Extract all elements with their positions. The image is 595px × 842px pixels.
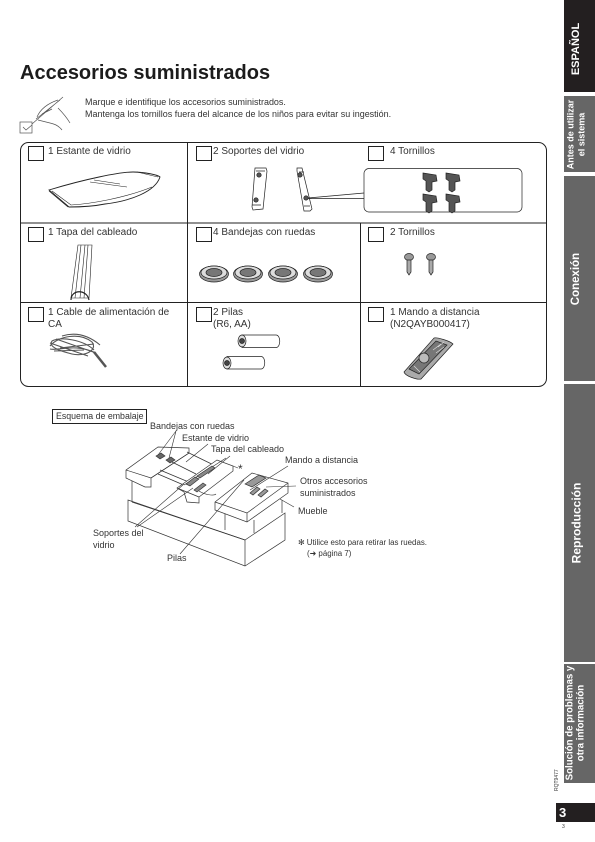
- page number: [556, 803, 595, 822]
- tab: solución: Solución de problemas y: [565, 665, 576, 780]
- label: 4 tornillos: 4 Tornillos: [390, 146, 435, 157]
- label: otros accesorios: suministrados: [300, 488, 356, 498]
- tab: solución: [564, 664, 595, 783]
- page number: 3: [559, 805, 566, 820]
- icon: remote control: [404, 338, 453, 379]
- note: (➜ página 7): [307, 549, 351, 558]
- title: Accesorios suministrados: [20, 62, 270, 84]
- icon: glass shelf: [49, 172, 160, 207]
- label: pilas: (R6, AA): [213, 319, 251, 330]
- icon: batteries: [223, 335, 280, 369]
- label: soportes: vidrio: [93, 540, 115, 550]
- checkbox: tapa: [28, 227, 44, 242]
- label: asterisk: *: [238, 462, 243, 476]
- label: pilas: 2 Pilas: [213, 307, 243, 318]
- tab: reproducción: Reproducción: [569, 483, 583, 563]
- checkbox: mando: [368, 307, 384, 322]
- label: tapa del cableado: 1 Tapa del cableado: [48, 227, 137, 238]
- back surface: [150, 451, 288, 520]
- checkbox: 2 tornillos: [368, 227, 384, 242]
- label: esquema de embalaje: [52, 409, 147, 424]
- label: esquema de embalaje: Esquema de embalaje: [56, 411, 144, 421]
- instructions text: [85, 97, 391, 119]
- furniture sides: [132, 480, 282, 540]
- icon: caster trays: [200, 266, 332, 282]
- small trays: [156, 453, 175, 463]
- checkbox: estante: [28, 146, 44, 161]
- label: estante: Estante de vidrio: [182, 433, 249, 443]
- label: cable de alimentación: 1 Cable de alimentación de: [48, 307, 169, 318]
- callout labels for packing diagram: [93, 421, 427, 563]
- label: mando a distancia: (N2QAYB000417): [390, 319, 470, 330]
- tab: solución: otra información: [576, 684, 587, 761]
- label: mueble: Mueble: [298, 506, 328, 516]
- checkbox: soportes: [196, 146, 212, 161]
- label: cable de alimentación: CA: [48, 319, 62, 330]
- tab: antes de utilizar: [564, 96, 595, 172]
- tab: español: [564, 0, 595, 92]
- left foam: [126, 447, 189, 487]
- checkbox: pilas: [196, 307, 212, 322]
- callout: four screws: [308, 168, 522, 213]
- label: soportes del vidrio: 2 Soportes del vidrio: [213, 146, 304, 157]
- panel: accessories table: [20, 142, 547, 387]
- label: pilas: Pilas: [167, 553, 187, 563]
- document code: RQT9477: [554, 769, 560, 791]
- tab: reproducción: [564, 384, 595, 662]
- icon: small screws: [404, 254, 436, 275]
- right foam: [215, 473, 288, 522]
- note: ✻ Utilice esto para retirar las ruedas.: [298, 538, 427, 547]
- label: estante de vidrio: 1 Estante de vidrio: [48, 146, 131, 157]
- label: bandejas: Bandejas con ruedas: [150, 421, 235, 431]
- label: tapa: Tapa del cableado: [211, 444, 284, 454]
- label: otros accesorios: [300, 476, 368, 498]
- instructions text: Marque e identifique los accesorios suministrados.: [85, 97, 286, 107]
- label: soportes: Soportes del: [93, 528, 144, 538]
- label: 2 tornillos: 2 Tornillos: [390, 227, 435, 238]
- tab: antes de utilizar: el sistema: [576, 112, 586, 156]
- icon: power cable: [50, 334, 106, 367]
- checkbox: bandejas: [196, 227, 212, 242]
- icon: wiring cover: [71, 245, 92, 300]
- note: [298, 538, 427, 558]
- label: mando: Mando a distancia: [285, 455, 358, 465]
- label: mando a distancia: [390, 307, 480, 330]
- icon: hand marking checkbox: [20, 96, 70, 134]
- tab: conexión: [564, 176, 595, 381]
- checkbox: tornillos: [368, 146, 384, 161]
- tab: antes de utilizar: Antes de utilizar: [565, 99, 575, 169]
- checkbox: cable: [28, 307, 44, 322]
- tab: conexión: Conexión: [570, 252, 582, 305]
- small page number: 3: [562, 824, 565, 830]
- label: bandejas con ruedas: 4 Bandejas con ruedas: [213, 227, 315, 238]
- label: mando a distancia: 1 Mando a distancia: [390, 307, 480, 318]
- lower box: [128, 500, 285, 566]
- leader lines: [135, 431, 296, 554]
- tab: español: ESPAÑOL: [570, 23, 582, 75]
- label: cable de alimentación: [48, 307, 169, 330]
- center foam: [177, 460, 233, 503]
- label: otros accesorios: Otros accesorios: [300, 476, 368, 486]
- label: pilas: [213, 307, 251, 330]
- icon: glass supports: [252, 168, 312, 211]
- label: soportes: [93, 528, 144, 550]
- instructions text: Mantenga los tornillos fuera del alcance de los niños para evitar su ingestión.: [85, 108, 391, 118]
